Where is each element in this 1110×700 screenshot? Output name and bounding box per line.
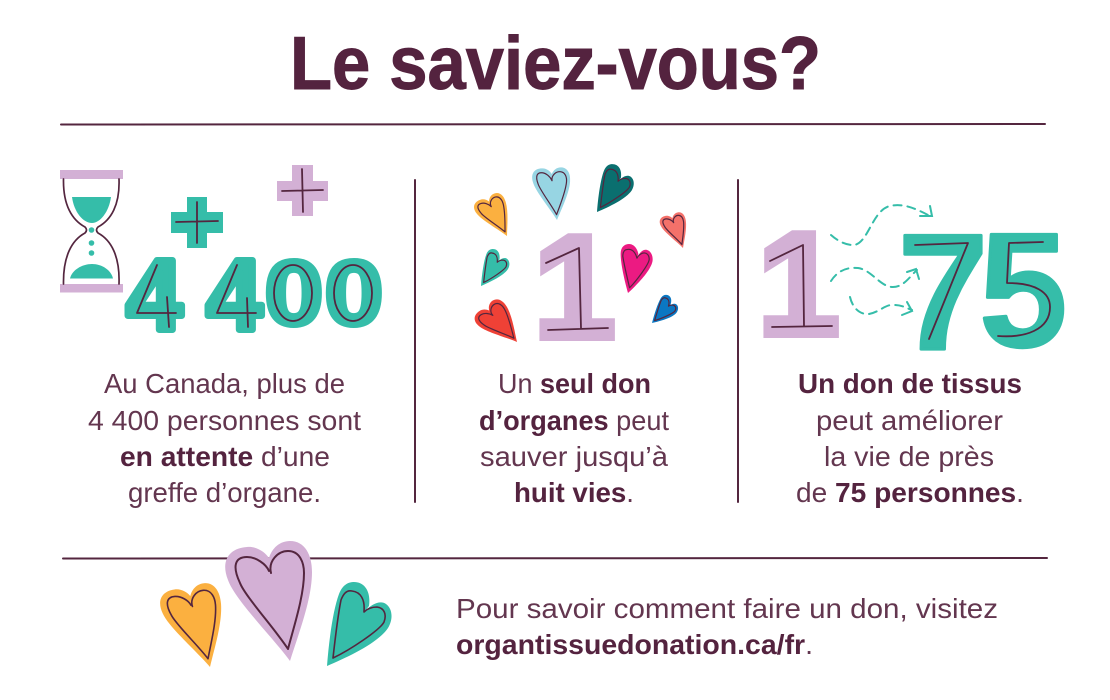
text: organ donation: huit vies.: [514, 477, 634, 508]
number: 4 400: 4: [126, 240, 182, 352]
panel: waiting list: [60, 165, 383, 508]
number: 75: [898, 199, 1067, 384]
number: 75: 5: [980, 199, 1067, 380]
text: organ donation: sauver jusqu’à: [480, 441, 669, 472]
title: Le saviez-vous?: [290, 21, 821, 105]
text: tissue donation: la vie de près: [824, 441, 994, 472]
text: tissue donation: de 75 personnes.: [796, 477, 1024, 508]
icon: lilac plus: [277, 165, 328, 216]
text: organ donation: d’organes peut: [479, 405, 669, 436]
panel: organ donation: [471, 164, 690, 508]
heart: lilac: [225, 541, 312, 661]
text: waiting list: 4 400 personnes sont: [88, 405, 361, 436]
text: tissue donation: [796, 368, 1024, 508]
text: organ donation: Un seul don: [498, 368, 651, 399]
heart: dark teal: [597, 164, 634, 212]
icon: hourglass: [60, 170, 123, 292]
heart: orange: [159, 582, 225, 670]
number: 4 400: 4: [206, 240, 262, 352]
number: 4 400: [126, 240, 383, 352]
heart: blue: [652, 293, 680, 327]
number: 4 400: 0: [324, 242, 383, 345]
footer hearts: [159, 541, 392, 670]
heart: pink: [612, 237, 661, 293]
text: tissue donation: peut améliorer: [816, 405, 1003, 436]
heart: red: [471, 296, 525, 355]
text: organ donation: [479, 368, 669, 508]
text: tissue donation: Un don de tissus: [798, 368, 1022, 399]
number: 1: 1: [534, 206, 615, 368]
footer text: Pour savoir comment faire un don, visitez: [456, 593, 998, 624]
heart: light blue: [529, 165, 571, 221]
arrow: top: [831, 205, 932, 245]
text: waiting list: [88, 368, 361, 508]
heart: teal: [327, 582, 392, 666]
heart: small teal: [481, 249, 509, 286]
heart: small orange: [472, 191, 515, 243]
arrow: middle: [831, 268, 919, 287]
heart: salmon: [659, 211, 690, 251]
icon: teal plus: [171, 197, 223, 248]
footer text: organtissuedonation.ca/fr .: [456, 629, 813, 660]
panel: tissue donation: [758, 199, 1067, 508]
text: waiting list: greffe d’organe.: [128, 477, 321, 508]
number: 1: 1: [758, 203, 839, 365]
text: waiting list: en attente d’une: [120, 441, 330, 472]
number: 75: 7: [898, 200, 988, 384]
footer text: [456, 593, 998, 660]
number: 4 400: 0: [264, 242, 323, 345]
text: waiting list: Au Canada, plus de: [104, 368, 345, 399]
arrow: bottom: [850, 297, 912, 315]
